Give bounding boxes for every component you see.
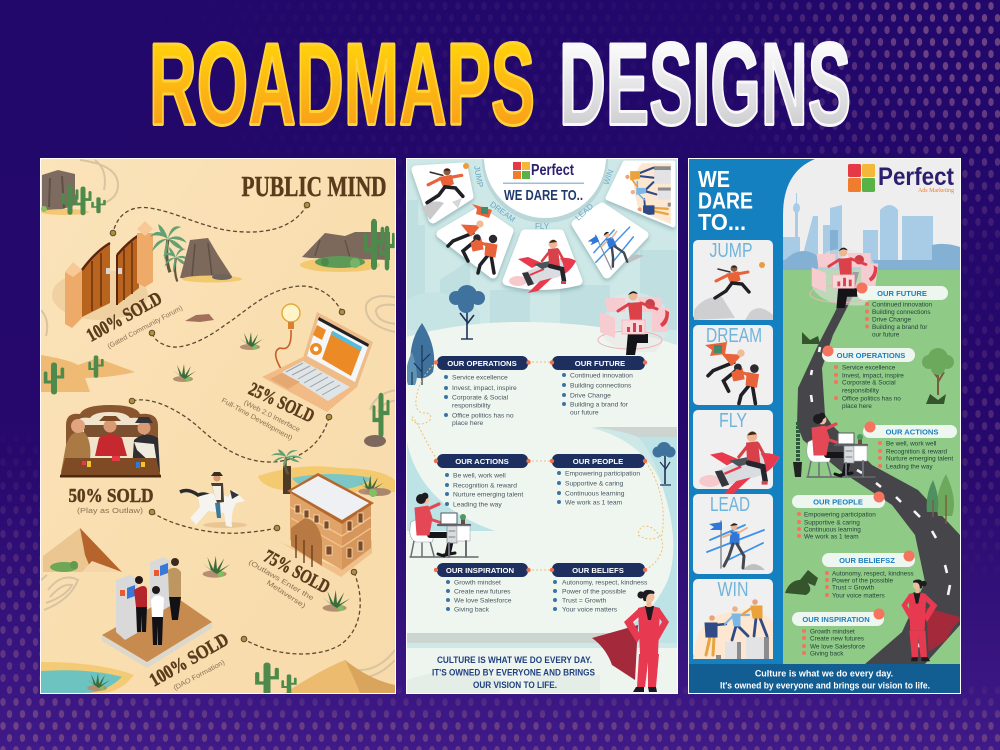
icon: pine trees right [927, 474, 954, 524]
section: our beliefs [550, 563, 648, 614]
section: our inspiration [434, 563, 531, 614]
heading: we dare to: WE [698, 166, 730, 192]
skyline [783, 193, 933, 262]
card: lead [693, 494, 773, 574]
card: jump: JUMP [710, 240, 752, 262]
section: our beliefs: OUR BELIEFS [572, 566, 624, 575]
card: jump [416, 163, 485, 220]
section: our people: Continuous learning [565, 490, 625, 498]
icon: oasis bottom left [41, 662, 134, 693]
decorative orange route [412, 362, 437, 460]
icon: small rock [185, 314, 214, 322]
section: our inspiration: Create new futures [454, 588, 511, 596]
label: 75% sold metaverse: (Outlaws Enter the [247, 559, 315, 602]
label: 75% sold metaverse [248, 549, 330, 608]
icon: worker at desk [410, 493, 478, 557]
section: our operations: responsibility [452, 402, 491, 410]
icon: pine trees left [406, 323, 434, 385]
section: our actions: Be well, work well [886, 440, 936, 448]
card: dream [441, 200, 517, 274]
section: our future: Building connections [570, 382, 632, 390]
section: our beliefsz [822, 550, 915, 600]
section: our beliefs: Power of the possible [562, 588, 626, 596]
section: our people [550, 454, 647, 506]
section: our inspiration: OUR INSPIRATION [802, 615, 870, 624]
section: our beliefs: Autonomy, respect, kindness [562, 580, 648, 586]
icon: wooden gate [52, 221, 153, 328]
arrow: dashed route five [241, 569, 360, 654]
ground: pale curved area [407, 322, 677, 633]
section: our actions [863, 422, 957, 470]
callout: culture statement: IT'S OWNED BY EVERYONE AND BRINGS [432, 668, 595, 678]
card: jump [693, 240, 773, 320]
section: our operations: Invest, impact, inspire [452, 385, 517, 392]
section: our operations: Office politics has no [842, 396, 901, 402]
label: 100% sold gated community forum: 100% SOLD [83, 288, 166, 346]
panel: public mind desert roadmap [40, 158, 400, 694]
section: our people: We work as 1 team [565, 500, 623, 506]
panel: road infographic [688, 158, 963, 694]
icon: voting booths on wooden platform [102, 557, 212, 668]
section: our inspiration: Growth mindset [454, 580, 501, 586]
callout: culture banner: It's owned by everyone and brings our vision to life. [720, 680, 930, 690]
section: our operations: Service excellence [452, 374, 508, 381]
panel: we dare to portrait infographic [406, 158, 678, 694]
green field [783, 270, 960, 665]
icon: palm by oasis [258, 449, 395, 497]
icon: saloon poker players [60, 405, 161, 478]
section: our future: Building a brand for [872, 324, 928, 331]
label: 25% sold web interface: (Web 2.0 Interface [242, 399, 301, 434]
section: our inspiration: We love Salesforce [454, 598, 512, 604]
section: our actions: OUR ACTIONS [886, 428, 938, 436]
icon: round blue tree [449, 285, 485, 339]
section: our future [856, 282, 948, 338]
label: 75% sold metaverse: Metaverse) [265, 580, 307, 610]
section: our inspiration: Giving back [454, 606, 490, 614]
label: 100% sold dao formation: 100% SOLD [146, 629, 233, 691]
label: 50% sold play as outlaw [69, 488, 153, 514]
section: our people: Supportive & caring [804, 520, 860, 526]
section: our actions [434, 454, 531, 508]
section: our people: OUR PEOPLE [573, 457, 623, 466]
heading: we dare to [698, 166, 753, 235]
card: fly: FLY [719, 410, 747, 432]
road [797, 272, 960, 664]
section: our actions: Leading the way [886, 464, 933, 470]
section: our operations [434, 356, 531, 427]
label: 50% sold play as outlaw: 50% SOLD [68, 485, 154, 507]
card: win: WIN [602, 168, 616, 186]
callout: culture banner [689, 664, 960, 693]
card: fly: FLY [535, 222, 550, 231]
icon: dunes and cacti bottom right [257, 660, 395, 694]
section: our actions: Nurture emerging talent [886, 456, 953, 462]
label: 50% sold play as outlaw: (Play as Outlaw) [77, 508, 143, 515]
icon: superhero woman on road [901, 580, 963, 661]
icon: worker and plant [793, 413, 875, 477]
label: 75% sold metaverse: 75% SOLD [260, 546, 333, 598]
section: our beliefsz: Power of the possible [832, 578, 894, 584]
section: our inspiration [792, 608, 884, 658]
section: our actions: Recognition & reward [886, 448, 948, 456]
card: jump: JUMP [472, 165, 485, 188]
card: dream [693, 325, 773, 405]
icon: small tree right [652, 442, 676, 485]
card: fly [693, 410, 780, 495]
heading: public mind: PUBLIC MIND [242, 172, 386, 203]
arrow: dashed route four [149, 509, 280, 533]
callout: culture statement: OUR VISION TO LIFE. [473, 680, 557, 691]
icon: dunes and cacti left [41, 355, 135, 392]
card: lead [574, 202, 644, 275]
section: our future: OUR FUTURE [877, 289, 927, 298]
section: our beliefsz: Trust = Growth [832, 584, 875, 592]
section: our future: Continued innovation [872, 302, 932, 308]
section: our operations: place here [452, 420, 484, 427]
section: our future: Building connections [872, 309, 931, 316]
label: 25% sold web interface [222, 382, 314, 441]
section: our people: Supportive & caring [565, 480, 624, 488]
section: our future: OUR FUTURE [575, 359, 625, 368]
section: our future [550, 356, 647, 416]
section: our inspiration: Growth mindset [810, 628, 855, 636]
panel: top semicircle header [482, 159, 608, 223]
section: our beliefs: Trust = Growth [562, 598, 606, 604]
section: our people [792, 492, 885, 540]
card: dream: DREAM [706, 325, 762, 347]
section: our inspiration: OUR INSPIRATION [446, 566, 515, 575]
section: our future: Building a brand for [570, 402, 629, 408]
icon: palm trees and rock [150, 224, 242, 282]
section: our operations: responsibility [842, 388, 880, 394]
section: our people: Empowering participation [565, 470, 640, 478]
label: 25% sold web interface: 25% SOLD [245, 379, 317, 427]
label: 100% sold dao formation [150, 634, 228, 691]
logo: perfect: Perfect [531, 162, 575, 179]
section: our future: Continued innovation [570, 372, 633, 380]
section: our inspiration: Giving back [810, 650, 844, 658]
label: 25% sold web interface: Full-Time Development) [220, 397, 293, 442]
card: lead: LEAD [574, 202, 595, 222]
section: our inspiration: Create new futures [810, 636, 864, 642]
section: our future: Drive Change [570, 392, 611, 400]
icon: western saloon building [280, 473, 374, 577]
icon: dashboard man on road [810, 248, 878, 308]
label: 100% sold dao formation: (DAO Formation) [172, 659, 226, 692]
section: our people: OUR PEOPLE [813, 498, 863, 506]
arrow: dashed route three [129, 398, 332, 462]
section: our actions: Nurture emerging talent [453, 492, 523, 498]
section: our people: We work as 1 team [804, 534, 859, 540]
section: our operations: Service excellence [842, 364, 896, 372]
heading: we dare to: TO... [698, 209, 746, 235]
section: our actions: OUR ACTIONS [455, 457, 509, 466]
section: our operations: Invest, impact, inspire [842, 372, 904, 380]
section: our people: Continuous learning [804, 526, 861, 534]
section: our operations: Corporate & Social [452, 394, 509, 402]
section: our beliefsz: Your voice matters [832, 592, 885, 600]
section: our people: Empowering participation [804, 512, 876, 518]
section: our operations: OUR OPERATIONS [447, 359, 517, 368]
label: 100% sold gated community forum: (Gated Community Forum) [107, 305, 184, 350]
section: our inspiration: We love Salesforce [810, 644, 865, 650]
icon: green tree [922, 348, 954, 404]
card: win: WIN [718, 579, 748, 601]
card: win [602, 163, 673, 225]
icon: cowboy on horse [180, 472, 247, 528]
card: fly [507, 222, 578, 293]
callout: culture banner: Culture is what we do every day. [755, 668, 893, 678]
logo: perfect [848, 163, 955, 194]
icon: rocks and cactus top right [300, 223, 393, 272]
icon: grass patches [785, 332, 820, 595]
section: our beliefsz: OUR BELIEFSZ [839, 556, 895, 565]
section: our operations: place here [842, 403, 872, 410]
logo: perfect: Ads Marketing [918, 188, 954, 194]
arrow: dashed route two [149, 286, 345, 347]
icon: superhero woman [592, 590, 669, 692]
heading: we dare to: DARE [698, 188, 753, 214]
card: win [693, 579, 773, 659]
section: our beliefs: Your voice matters [562, 606, 618, 614]
section: our actions: Recognition & reward [453, 482, 517, 490]
section: our future: our future [872, 332, 900, 338]
section: our operations [822, 346, 915, 410]
icon: rock and cactus top left [41, 170, 104, 215]
logo: perfect: Perfect [878, 163, 955, 191]
card: lead: LEAD [710, 494, 750, 516]
section: our actions: Leading the way [453, 502, 502, 508]
card: dream: DREAM [488, 200, 517, 224]
section: our operations: Office politics has no [452, 412, 514, 420]
title: Roadmaps Designs: ROADMAPS [149, 18, 535, 150]
section: our future: Drive Change [872, 316, 912, 324]
section: our actions: Be well, work well [453, 472, 506, 480]
icon: cactus and stones right [364, 396, 388, 447]
icon: laptop with light bulb [262, 304, 373, 412]
icon: grass tufts [87, 332, 350, 691]
callout: culture statement: CULTURE IS WHAT WE DO EVERY DAY. [437, 655, 592, 666]
section: our future: our future [570, 410, 599, 416]
arrow: dashed route one [110, 202, 310, 236]
section: our beliefsz: Autonomy, respect, kindness [832, 570, 914, 578]
icon: pyramids [43, 528, 122, 572]
icon: dashboard man [598, 291, 670, 355]
heading: we dare to: WE DARE TO.. [504, 187, 583, 204]
section: our operations: Corporate & Social [842, 380, 896, 386]
callout: culture statement [432, 655, 595, 691]
section: our operations: OUR OPERATIONS [837, 351, 905, 360]
